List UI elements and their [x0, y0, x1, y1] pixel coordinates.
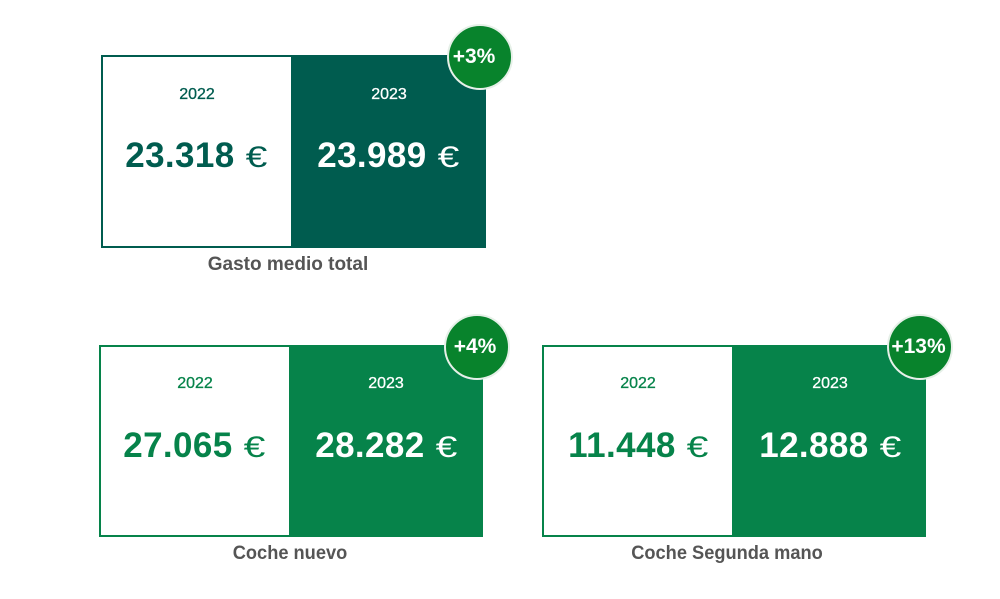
value 2023: € — [435, 431, 457, 464]
value 2023: 12.888 — [759, 426, 869, 465]
year 2023: 2023 — [371, 86, 407, 103]
year 2022: 2022 — [179, 86, 215, 103]
2022 box — [99, 345, 291, 537]
year 2023: 2023 — [812, 375, 848, 392]
value 2022: € — [686, 431, 708, 464]
value 2023: 28.282 — [315, 426, 425, 465]
caption: Gasto medio total — [208, 254, 368, 275]
2023 box — [290, 345, 483, 537]
panel: gasto medio total — [101, 24, 513, 275]
caption: Coche nuevo — [233, 543, 347, 564]
year 2022: 2022 — [620, 375, 656, 392]
value 2022: 11.448 — [568, 426, 676, 465]
2023 box — [292, 55, 486, 248]
value 2023: € — [437, 141, 459, 174]
value 2023: € — [879, 431, 901, 464]
value 2022: 23.318 — [125, 136, 235, 175]
2022 box — [101, 55, 293, 248]
year 2023: 2023 — [368, 375, 404, 392]
badge +4%: +4% — [454, 335, 496, 358]
caption: Coche Segunda mano — [631, 543, 823, 564]
panel: coche nuevo — [99, 314, 510, 564]
value 2022: 27.065 — [123, 426, 233, 465]
badge +3% — [447, 24, 513, 90]
value 2022: € — [243, 431, 265, 464]
value 2023: 23.989 — [317, 136, 427, 175]
badge +4% — [444, 314, 510, 380]
2023 box — [732, 345, 926, 537]
badge +13%: +13% — [891, 335, 946, 358]
value 2022: € — [245, 141, 267, 174]
badge +13% — [887, 314, 953, 380]
badge +3%: +3% — [453, 45, 495, 68]
year 2022: 2022 — [177, 375, 213, 392]
panel: coche segunda mano — [542, 314, 953, 564]
2022 box — [542, 345, 734, 537]
